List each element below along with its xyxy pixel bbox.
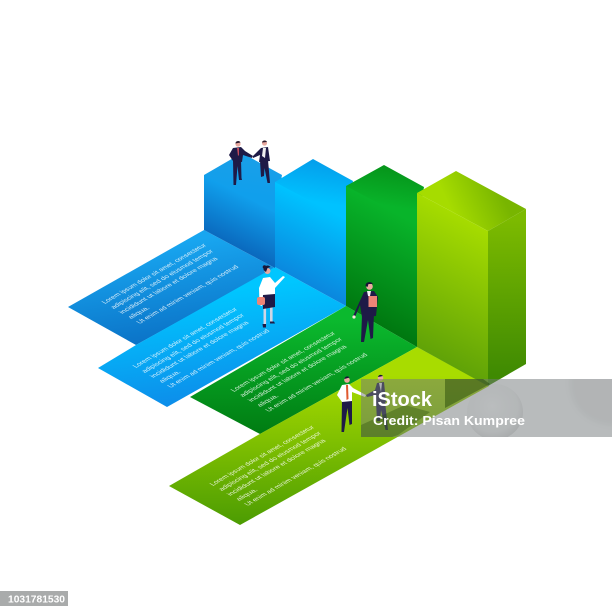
text block: dark blue floor: adipiscing elit, sed do eiusmod tempor: [109, 249, 216, 310]
bar 2: light blue: [275, 159, 353, 306]
figure: businesswoman presenting: [257, 265, 285, 328]
text block: lime floor: adipiscing elit, sed do eiusmod tempor: [217, 431, 324, 492]
floor panel: green: [190, 306, 417, 434]
figure: man in white shirt shaking hands: [337, 376, 366, 432]
text block: green floor: adipiscing elit, sed do eiusmod tempor: [238, 337, 345, 398]
text block: green floor: Lorem ipsum dolor sit amet, consectetur: [230, 331, 338, 393]
text block: light blue floor: aliqua.: [158, 369, 183, 384]
text block: light blue floor: Lorem ipsum dolor sit amet, consectetur: [132, 307, 240, 369]
text block: green floor: aliqua.: [256, 393, 281, 408]
bar 4: lime: [417, 171, 526, 386]
watermark: iStock credit band: iStock: [372, 389, 433, 411]
image id tag: 1031781530: [8, 594, 65, 606]
figure: man in grey suit shaking hands: [366, 375, 388, 430]
text block: green floor: [230, 331, 373, 413]
text block: dark blue floor: [101, 243, 244, 325]
image id tag: [0, 591, 68, 606]
floor panel: lime: [169, 347, 489, 525]
figure: businessman shaking hands, left: [229, 141, 253, 185]
infographic: isometric bar chart: [0, 140, 612, 606]
figure: businessman shaking hands, right: [253, 140, 270, 183]
bar 3: green: [346, 165, 424, 347]
text block: light blue floor: Ut enim ad minim veniam, quis nostrud: [166, 328, 272, 389]
bar 1: dark blue: [204, 153, 282, 268]
watermark: iStock credit band: Credit: Pisan Kumpree: [373, 413, 525, 428]
text block: lime floor: aliqua.: [235, 487, 260, 502]
floor panel: dark blue: [68, 230, 275, 345]
text block: light blue floor: [132, 307, 275, 389]
text block: light blue floor: adipiscing elit, sed do eiusmod tempor: [140, 313, 247, 374]
text block: lime floor: incididunt ut labore et dolore magna: [226, 438, 328, 497]
text block: lime floor: [209, 425, 352, 507]
text block: lime floor: Lorem ipsum dolor sit amet, consectetur: [209, 425, 317, 487]
text block: dark blue floor: Ut enim ad minim veniam, quis nostrud: [135, 264, 241, 325]
figure: businessman with folder: [352, 282, 378, 342]
text block: green floor: Ut enim ad minim veniam, quis nostrud: [264, 352, 370, 413]
text block: lime floor: Ut enim ad minim veniam, quis nostrud: [243, 446, 349, 507]
text block: dark blue floor: Lorem ipsum dolor sit amet, consectetur: [101, 243, 209, 305]
text block: light blue floor: incididunt ut labore et dolore magna: [149, 320, 251, 379]
floor panel: light blue: [98, 267, 346, 407]
watermark: iStock credit band: [361, 379, 612, 437]
text block: green floor: incididunt ut labore et dolore magna: [247, 344, 349, 403]
text block: dark blue floor: aliqua.: [127, 305, 152, 320]
text block: dark blue floor: incididunt ut labore et dolore magna: [118, 256, 220, 315]
